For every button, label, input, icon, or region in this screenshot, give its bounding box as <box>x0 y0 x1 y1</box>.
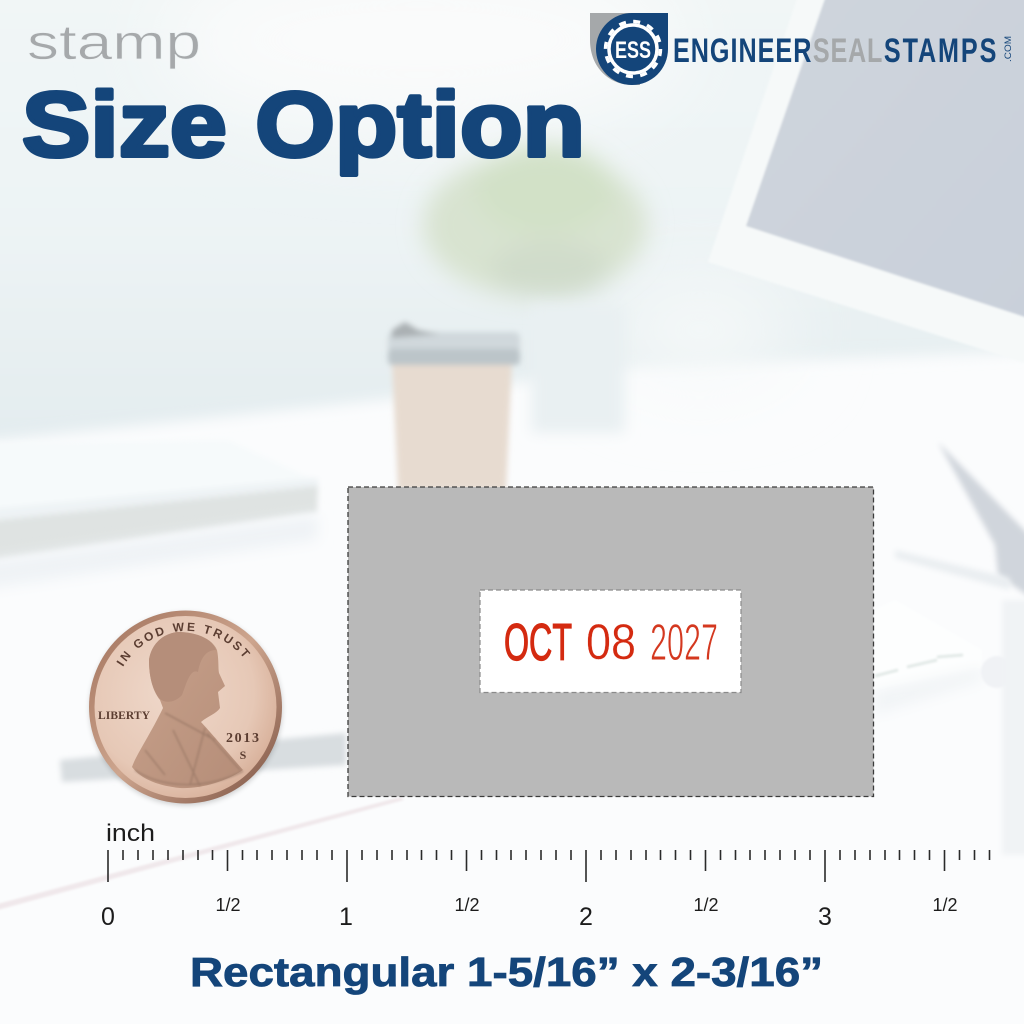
ruler numbers: 0 <box>101 903 115 931</box>
pen under coin <box>60 733 346 782</box>
ruler numbers: 3 <box>818 903 832 931</box>
logo wordmark: ENGINEER <box>673 32 811 70</box>
plant pot <box>531 305 625 433</box>
ruler numbers: 1 <box>339 903 353 931</box>
desk streak <box>0 797 404 912</box>
ruler half marks: 1/2 <box>932 895 958 915</box>
unit label: inch <box>106 820 155 847</box>
date: 08: 08 <box>586 614 636 670</box>
title: Size Option: Size Option <box>22 74 585 176</box>
plant <box>423 145 647 298</box>
logo: Engineer Seal Stamps <box>590 13 1013 85</box>
ruler numbers: 2 <box>579 903 593 931</box>
ruler ticks <box>108 850 990 882</box>
coffee cup <box>388 322 520 490</box>
ruler half marks: 1/2 <box>454 895 480 915</box>
logo wordmark: SEAL <box>813 32 882 70</box>
penny <box>88 610 284 808</box>
Lincoln portrait <box>132 632 243 788</box>
date: OCT: OCT <box>504 614 572 672</box>
white imprint area <box>480 590 741 692</box>
title: stamp: stamp <box>27 16 201 70</box>
ruler numbers <box>101 903 832 931</box>
ruler half marks: 1/2 <box>215 895 241 915</box>
ruler <box>101 820 990 931</box>
notebook <box>0 440 318 562</box>
stamp impression outer grey panel <box>348 487 874 796</box>
notebook shadow <box>0 515 318 590</box>
ruler half marks: 1/2 <box>693 895 719 915</box>
wall <box>0 0 1024 445</box>
ruler half marks <box>215 895 958 915</box>
date: 2027: 2027 <box>650 614 718 672</box>
coin lettering: IN GOD WE TRUST <box>116 622 250 666</box>
penny: 2013 <box>226 731 259 746</box>
size caption: Rectangular 1-5/16” x 2-3/16” <box>190 949 823 995</box>
logo badge <box>590 13 668 85</box>
logo .com: .COM <box>1003 36 1013 62</box>
logo wordmark: STAMPS <box>884 32 996 70</box>
pens <box>895 442 1024 855</box>
penny: LIBERTY <box>98 710 151 722</box>
logo badge: ESS <box>615 37 651 64</box>
keyboard <box>874 600 1013 715</box>
logo wordmark <box>673 32 996 70</box>
penny: S <box>240 748 247 762</box>
monitor <box>708 0 1024 366</box>
